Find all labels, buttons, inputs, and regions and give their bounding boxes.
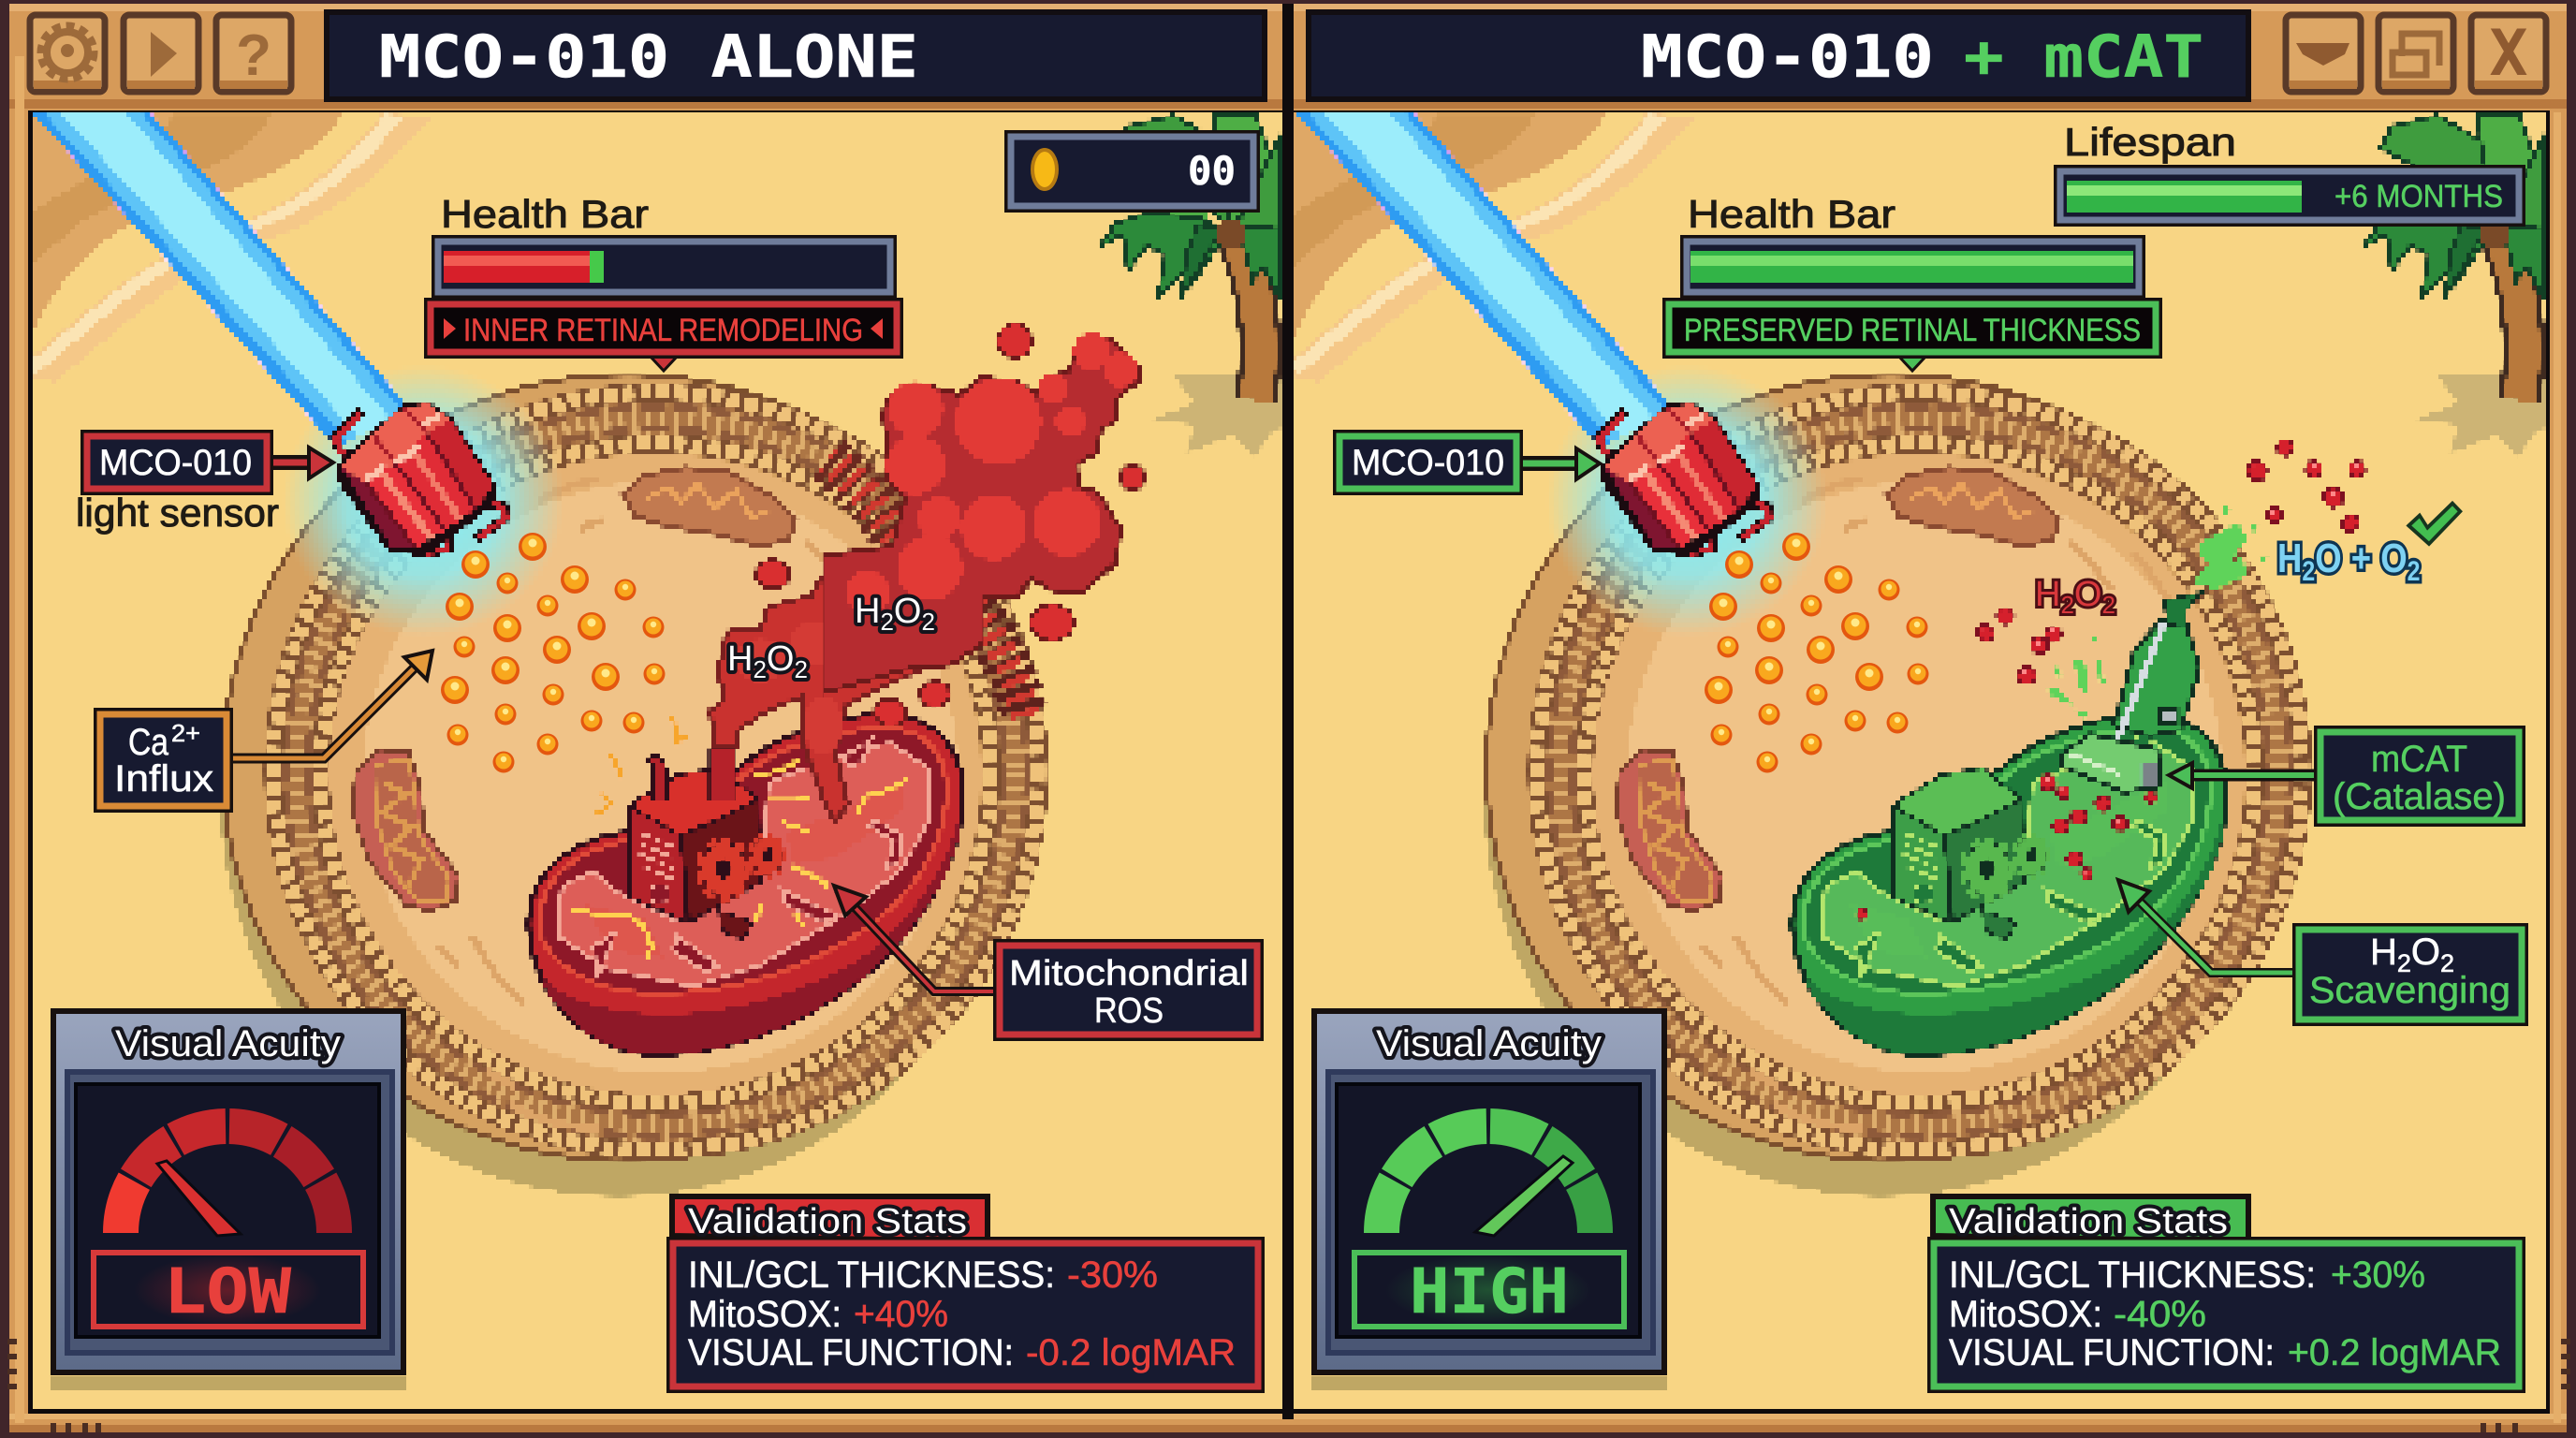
gauge panel: high visual acuity (1311, 1011, 1667, 1390)
callout: calcium influx: Ca (128, 722, 169, 763)
readout: HIGH: HIGH (1410, 1255, 1569, 1328)
stats panel: right: +0.2 logMAR (2288, 1332, 2501, 1373)
callout: mCAT catalase: (Catalase) (2333, 776, 2506, 817)
label: water and oxygen: O + O (2315, 535, 2408, 581)
right window buttons (2286, 15, 2546, 92)
callout: MCO-010 right: MCO-010 (1352, 443, 1504, 483)
readout: HIGH (1354, 1253, 1624, 1328)
callout: calcium influx (100, 651, 432, 806)
stats panel: left: -0.2 logMAR (1026, 1332, 1236, 1373)
callout: mCAT catalase: mCAT (2371, 739, 2467, 780)
callout: calcium influx: 2+ (171, 719, 200, 747)
lifespan bar: Lifespan (2064, 120, 2236, 164)
stats panel: right: INL/GCL THICKNESS: (1949, 1255, 2316, 1296)
title bar: MCO-010 + mCAT (1309, 12, 2248, 99)
scene: right retina cell (1264, 94, 2574, 1423)
stats panel: right: +30% (2331, 1255, 2425, 1296)
callout: mitochondrial ROS (834, 886, 1257, 1034)
label: H2O2 upper smoke: H (855, 592, 880, 631)
stats panel: left (672, 1196, 1258, 1387)
title bar: MCO-010 alone (327, 12, 1265, 99)
icon: gear (40, 25, 95, 80)
gauge needle (157, 1161, 241, 1236)
stats panel: right: -40% (2114, 1294, 2206, 1335)
calcium ions: left (441, 533, 665, 773)
ruptured membrane damage (828, 459, 1025, 716)
label: H2O2 lower smoke: 2 (794, 655, 808, 683)
callout: calcium influx: Influx (114, 758, 213, 800)
label: water and oxygen: H (2277, 535, 2302, 581)
banner: inner retinal remodeling: INNER RETINAL REMODELING (463, 313, 863, 348)
coin counter: 00 (1188, 148, 1236, 194)
label: H2O2 upper smoke: 2 (921, 608, 935, 636)
icon: help: ? (236, 23, 271, 88)
banner: preserved retinal thickness (1669, 304, 2156, 371)
stats panel: left: +40% (854, 1294, 948, 1335)
icon: minimize (2296, 43, 2349, 66)
label: H2O2 in cytosol: H (2035, 575, 2060, 614)
health bar: left: Health Bar (441, 192, 649, 236)
caption: light sensor: light sensor (76, 491, 279, 535)
calcium ions: right (1705, 533, 1928, 773)
stats panel: left: VISUAL FUNCTION: (688, 1332, 1014, 1373)
stats panel: right (1933, 1196, 2519, 1387)
callout: MCO-010 left: MCO-010 (99, 443, 252, 483)
left toolbar buttons (30, 15, 291, 92)
stats panel: left: INL/GCL THICKNESS: (688, 1255, 1055, 1296)
title bar: MCO-010 alone: MCO-010 ALONE (379, 22, 918, 91)
callout: H2O2 scavenging: 2 (2397, 949, 2411, 977)
gauge panel: low visual acuity: Visual Acuity (115, 1023, 341, 1064)
catalase vacuum (2062, 593, 2202, 793)
label: H2O2 in cytosol: 2 (2060, 591, 2074, 619)
banner: inner retinal remodeling (431, 304, 897, 371)
callout: MCO-010 right (1339, 436, 1600, 489)
stats panel: right: MitoSOX: (1949, 1294, 2102, 1335)
gauge needle (1475, 1156, 1573, 1236)
label: H2O2 upper smoke: O (894, 592, 921, 631)
callout: H2O2 scavenging: Scavenging (2309, 970, 2510, 1011)
readout: LOW (94, 1253, 363, 1328)
callout: mitochondrial ROS: Mitochondrial (1009, 954, 1249, 993)
label: H2O2 in cytosol: O (2074, 575, 2101, 614)
gauge arcs (121, 1126, 334, 1233)
coin counter (1011, 137, 1253, 206)
label: H2O2 upper smoke: 2 (880, 608, 894, 636)
label: H2O2 in cytosol: 2 (2101, 591, 2115, 619)
divider between panels (1282, 4, 1294, 1419)
banner: preserved retinal thickness: PRESERVED RETINAL THICKNESS (1684, 313, 2141, 348)
title bar: MCO-010 + mCAT: MCO-010 (1641, 22, 1934, 91)
icon: restore (2393, 34, 2439, 75)
callout: H2O2 scavenging: H (2370, 932, 2397, 973)
gauge panel: high visual acuity: Visual Acuity (1376, 1023, 1602, 1064)
chimney and sparks (573, 714, 907, 958)
icon: check mark (2408, 504, 2460, 544)
health bar: right (1687, 192, 2139, 292)
callout: mitochondrial ROS: ROS (1094, 991, 1164, 1031)
callout: H2O2 scavenging (2118, 880, 2522, 1020)
callout: mCAT catalase (2169, 732, 2519, 820)
label: water and oxygen: 2 (2408, 555, 2420, 587)
health bar: left (438, 192, 890, 292)
mitochondrion: damaged (529, 714, 963, 1054)
stats panel: left: -30% (1067, 1255, 1158, 1296)
title bar: MCO-010 + mCAT: + mCAT (1964, 22, 2203, 91)
gauge panel: low visual acuity (51, 1011, 406, 1390)
scene: left retina cell (0, 94, 1310, 1423)
health bar: right: Health Bar (1688, 192, 1895, 236)
callout: H2O2 scavenging: 2 (2440, 949, 2454, 977)
lifespan bar: +6 MONTHS (2334, 179, 2503, 214)
smoke cloud (710, 324, 1145, 822)
gauge arcs (1382, 1126, 1595, 1233)
readout: LOW: LOW (164, 1255, 291, 1328)
callout: MCO-010 left (87, 436, 333, 489)
label: H2O2 lower smoke: H (727, 639, 753, 679)
stats panel: right: Validation Stats (1949, 1202, 2228, 1241)
label: water and oxygen: 2 (2302, 555, 2315, 587)
icon: close: X (2490, 17, 2528, 91)
stats panel: left: Validation Stats (688, 1202, 967, 1241)
mitochondrion: healthy (1793, 714, 2227, 1054)
lifespan bar (2060, 120, 2519, 220)
callout: H2O2 scavenging: O (2411, 932, 2440, 973)
label: H2O2 lower smoke: 2 (753, 655, 767, 683)
icon: play triangle (151, 32, 177, 77)
stats panel: left: MitoSOX: (688, 1294, 842, 1335)
label: H2O2 lower smoke: O (767, 639, 794, 679)
stats panel: right: VISUAL FUNCTION: (1949, 1332, 2275, 1373)
catalase scavenged droplets (1856, 438, 2366, 920)
icon: coin (1032, 150, 1057, 189)
